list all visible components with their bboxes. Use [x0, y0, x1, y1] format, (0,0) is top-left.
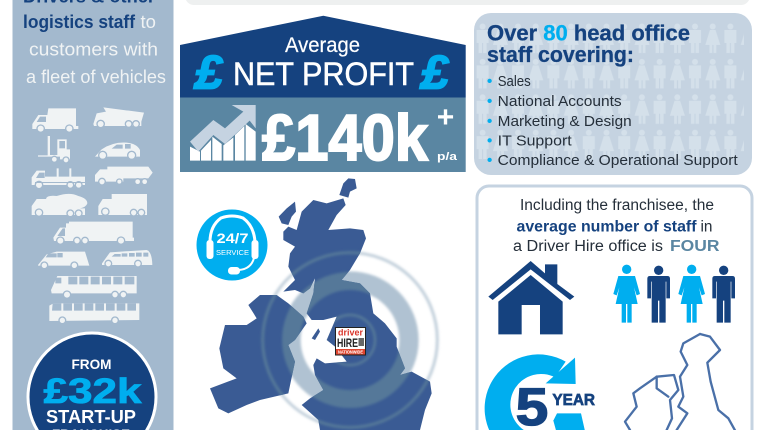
list: departments: National Accounts [498, 93, 622, 110]
logo: driver hire [336, 328, 366, 355]
list: departments: • [487, 113, 492, 130]
text: average number of staff: Including the franchisee, the [520, 197, 714, 214]
list: departments: Marketing & Design [498, 113, 632, 130]
text: average number of staff: average number of staff [516, 218, 697, 236]
list: departments: • [487, 152, 492, 169]
icon: pound signs [192, 54, 450, 90]
heading: over 80 head office staff [487, 20, 690, 67]
logo: driver hire: HIRE [337, 336, 358, 350]
panel: average net profit [180, 16, 466, 174]
badge: from 32k start-up franchise: START-UP [46, 407, 136, 427]
map: UK and Ireland coverage [210, 178, 437, 430]
heading: drivers and logistics staff: to [140, 11, 156, 32]
text: average number of staff: a Driver Hire office is [513, 238, 663, 255]
list: departments: • [487, 132, 492, 150]
icon: rising chart [190, 105, 256, 161]
icon: plus: + [437, 101, 454, 134]
icons: staff figures [613, 265, 735, 323]
heading: drivers and logistics staff: logistics staff [23, 11, 136, 32]
panel: head office staff [474, 13, 752, 175]
list: departments: IT Support [498, 132, 573, 150]
panel: fleet of vehicles [12, 0, 174, 430]
icon: house [488, 261, 574, 334]
panel: average staff per office [477, 186, 752, 430]
text: average number of staff [513, 197, 720, 255]
icon: pound signs: £ [419, 46, 449, 98]
list: departments: Compliance & Operational Support [498, 152, 739, 169]
heading: drivers and logistics staff: customers with [29, 38, 158, 60]
list: departments: • [487, 73, 492, 90]
icon: pound signs: £ [193, 46, 223, 98]
top banner strip [185, 0, 750, 5]
figure: 140k per annum: £140k [262, 101, 429, 174]
icon: UK outline map [625, 334, 737, 430]
heading: over 80 head office staff: Over 80 head office [487, 20, 690, 46]
label: per annum: p/a [437, 151, 458, 163]
heading: drivers and logistics staff: a fleet of vehicles [26, 66, 166, 87]
text: average number of staff: in [700, 218, 712, 236]
list: departments [487, 73, 739, 169]
heading: average: Average [285, 34, 360, 57]
badge: from 32k start-up franchise [28, 333, 156, 430]
list: departments: Sales [498, 73, 531, 90]
logo: driver hire: NATIONWIDE [338, 350, 363, 354]
badge: from 32k start-up franchise: £32k [44, 372, 142, 411]
heading: over 80 head office staff: staff covering: [487, 42, 634, 67]
list: departments: • [487, 93, 492, 110]
icon: 24/7 service headset: 24/7 [216, 230, 249, 246]
icons: fleet vehicles [32, 107, 153, 324]
icon: 5 year cycle [485, 354, 595, 430]
logo: driver hire: driver [338, 328, 363, 338]
icon: 24/7 service headset: SERVICE [216, 248, 249, 257]
icon: 5 year cycle: YEAR [552, 392, 595, 409]
icon: 24/7 service headset [196, 210, 268, 280]
text: average number of staff: FOUR [670, 238, 720, 255]
heading: drivers and logistics staff [23, 0, 166, 87]
heading: net profit: NET PROFIT [233, 56, 414, 92]
badge: from 32k start-up franchise: FROM [72, 356, 112, 372]
